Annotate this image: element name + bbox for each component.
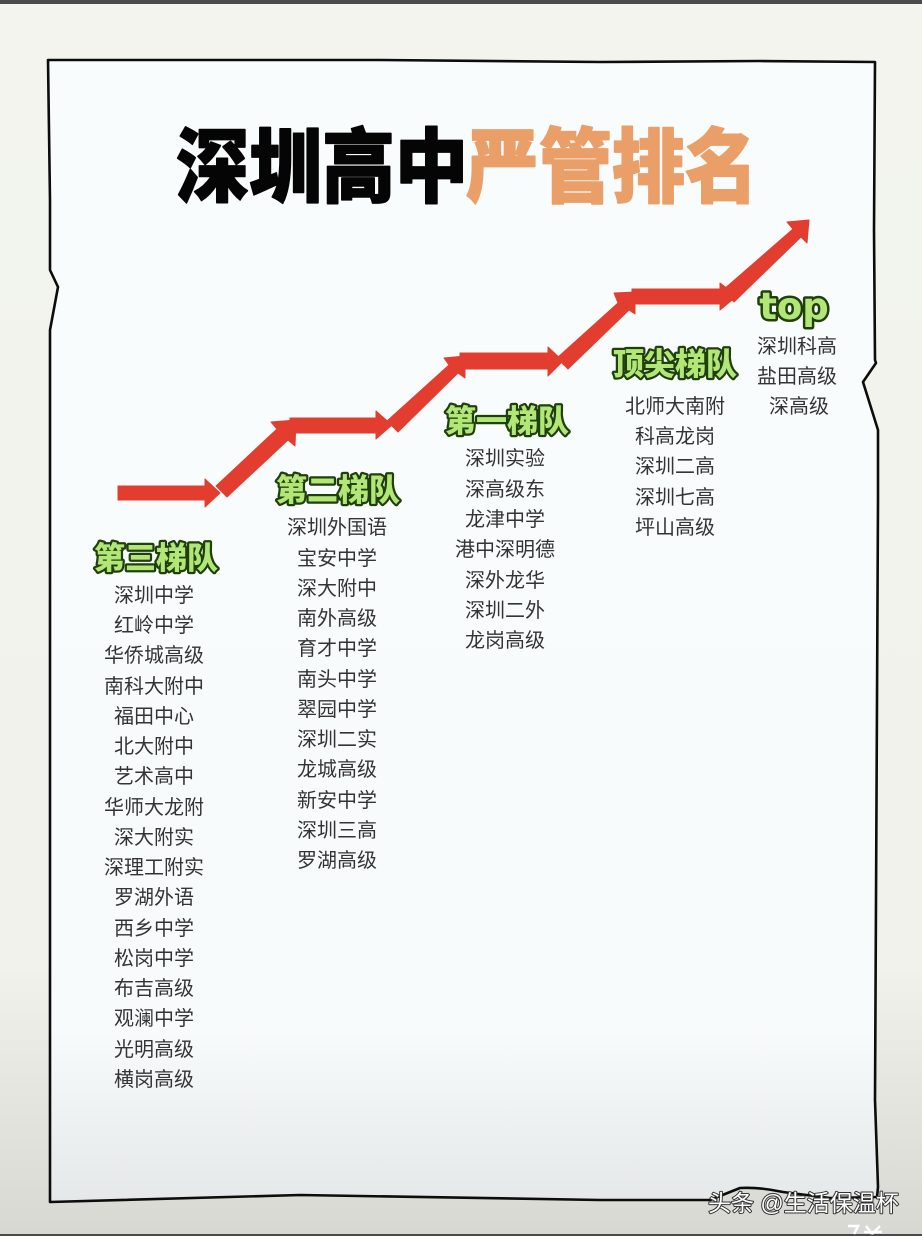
list: first tier schools bbox=[455, 447, 555, 652]
list: elite tier schools: 北师大南附 bbox=[625, 395, 725, 418]
heading: 第一梯队: 第一梯队 bbox=[445, 404, 569, 439]
list: second tier schools: 翠园中学 bbox=[297, 698, 377, 721]
title: orange part: 严管排名 bbox=[466, 124, 758, 214]
list: third tier schools: 深大附实 bbox=[114, 826, 194, 849]
list: second tier schools: 新安中学 bbox=[297, 789, 377, 812]
title: black part: 深圳高中 bbox=[176, 124, 468, 214]
list: third tier schools: 福田中心 bbox=[114, 705, 194, 728]
list: elite tier schools: 深圳七高 bbox=[635, 486, 715, 509]
list: top tier schools: 深圳科高 bbox=[757, 335, 837, 358]
arrow segment 5 bbox=[460, 347, 563, 376]
list: elite tier schools bbox=[625, 395, 725, 539]
arrow segment 4 bbox=[387, 356, 465, 432]
list: third tier schools: 红岭中学 bbox=[114, 614, 194, 637]
list: third tier schools: 深圳中学 bbox=[114, 584, 194, 607]
list: first tier schools: 深外龙华 bbox=[465, 569, 545, 592]
top dark edge bar bbox=[0, 0, 922, 4]
list: third tier schools: 华师大龙附 bbox=[104, 796, 204, 819]
list: elite tier schools: 坪山高级 bbox=[635, 516, 715, 539]
arrow segment 3 bbox=[290, 411, 392, 439]
list: third tier schools: 光明高级 bbox=[114, 1038, 194, 1061]
list: third tier schools: 横岗高级 bbox=[114, 1068, 194, 1091]
list: third tier schools: 观澜中学 bbox=[114, 1007, 194, 1030]
list: second tier schools: 深圳三高 bbox=[297, 819, 377, 842]
column: 顶尖梯队 bbox=[613, 347, 737, 539]
arrow segment 7 bbox=[632, 283, 737, 310]
list: second tier schools: 宝安中学 bbox=[297, 547, 377, 570]
arrow segment 8 bbox=[723, 220, 809, 302]
list: second tier schools bbox=[287, 516, 387, 872]
bottom dark edge bar bbox=[0, 1234, 922, 1236]
list: second tier schools: 深圳外国语 bbox=[287, 516, 387, 539]
heading: 第二梯队: 第二梯队 bbox=[276, 473, 400, 508]
list: top tier schools bbox=[757, 335, 837, 418]
list: second tier schools: 深大附中 bbox=[297, 577, 377, 600]
arrow segment 6 bbox=[557, 292, 635, 369]
list: second tier schools: 深圳二实 bbox=[297, 728, 377, 751]
list: top tier schools: 盐田高级 bbox=[757, 365, 837, 388]
list: second tier schools: 龙城高级 bbox=[297, 758, 377, 781]
column: 第一梯队 bbox=[445, 404, 569, 652]
list: second tier schools: 南外高级 bbox=[297, 607, 377, 630]
list: top tier schools: 深高级 bbox=[769, 395, 829, 418]
arrow segment 2 bbox=[216, 420, 296, 497]
list: third tier schools: 深理工附实 bbox=[104, 856, 204, 879]
heading: 顶尖梯队: 顶尖梯队 bbox=[613, 347, 737, 382]
list: elite tier schools: 深圳二高 bbox=[635, 455, 715, 478]
list: first tier schools: 深圳二外 bbox=[465, 599, 545, 622]
column: 第三梯队 bbox=[94, 541, 218, 1091]
arrow segment 1 bbox=[118, 479, 220, 507]
list: third tier schools: 西乡中学 bbox=[114, 917, 194, 940]
list: third tier schools: 北大附中 bbox=[114, 735, 194, 758]
list: third tier schools: 艺术高中 bbox=[114, 765, 194, 788]
list: second tier schools: 南头中学 bbox=[297, 668, 377, 691]
list: third tier schools: 松岗中学 bbox=[114, 947, 194, 970]
list: first tier schools: 深圳实验 bbox=[465, 447, 545, 470]
list: first tier schools: 深高级东 bbox=[465, 478, 545, 501]
list: first tier schools: 港中深明德 bbox=[455, 538, 555, 561]
column: top bbox=[757, 285, 837, 418]
list: third tier schools: 罗湖外语 bbox=[114, 886, 194, 909]
watermark: 头条 @生活保温杯 bbox=[708, 1190, 899, 1216]
heading: top: top bbox=[759, 285, 829, 328]
title bbox=[176, 124, 758, 214]
list: elite tier schools: 科高龙岗 bbox=[635, 425, 715, 448]
list: third tier schools: 华侨城高级 bbox=[104, 644, 204, 667]
cut-off white glyph at bottom edge bbox=[848, 1226, 882, 1234]
list: third tier schools: 南科大附中 bbox=[104, 675, 204, 698]
list: third tier schools: 布吉高级 bbox=[114, 977, 194, 1000]
column: 第二梯队 bbox=[276, 473, 400, 872]
list: first tier schools: 龙岗高级 bbox=[465, 629, 545, 652]
list: third tier schools bbox=[104, 584, 204, 1091]
heading: 第三梯队: 第三梯队 bbox=[94, 541, 218, 576]
rising stepped red arrow bbox=[118, 220, 809, 507]
list: second tier schools: 罗湖高级 bbox=[297, 849, 377, 872]
list: first tier schools: 龙津中学 bbox=[465, 508, 545, 531]
list: second tier schools: 育才中学 bbox=[297, 637, 377, 660]
